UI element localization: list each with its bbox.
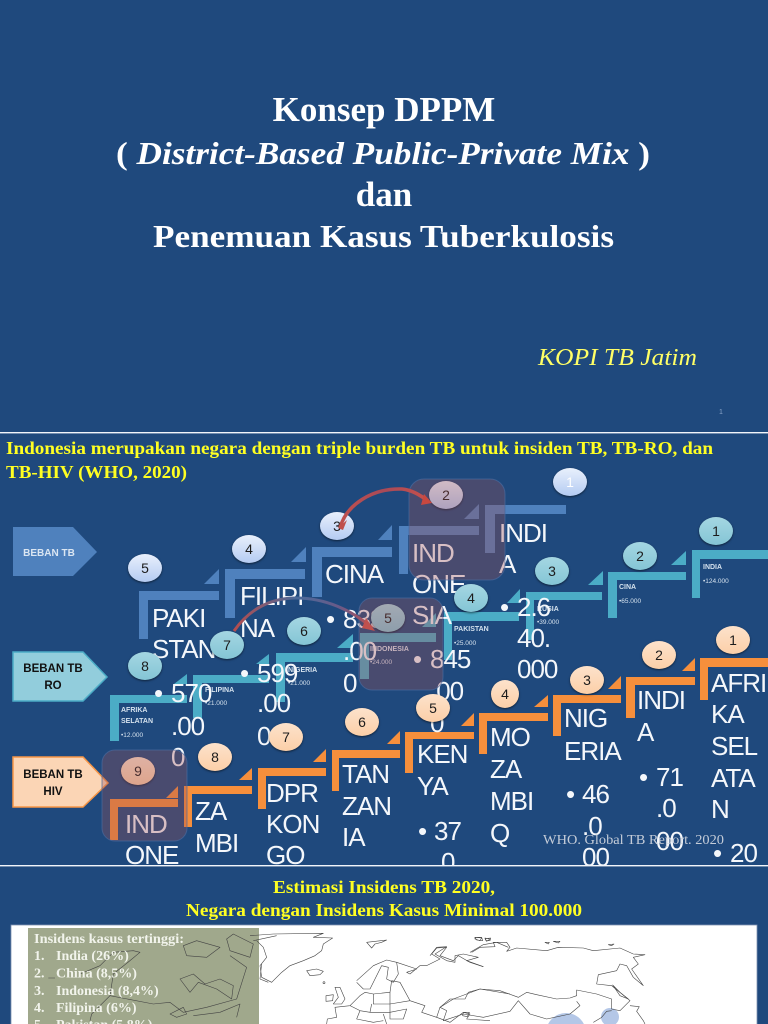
asia xyxy=(430,937,645,1024)
small country labels: •21.000 xyxy=(205,700,228,707)
large country labels HIV row: MBI xyxy=(195,828,238,858)
small country labels: •25.000 xyxy=(454,640,477,647)
large country labels TB row: • xyxy=(240,658,249,688)
map background xyxy=(11,925,757,1024)
large country labels TB row: 000 xyxy=(517,654,558,684)
heading xyxy=(6,442,713,482)
large country labels HIV row: ZA xyxy=(195,796,228,826)
source note: WHO. Global TB Report. 2020 xyxy=(543,833,724,848)
large country labels HIV row: AFRI xyxy=(711,668,766,698)
small country labels: •124.000 xyxy=(703,578,729,585)
large country labels TB row: SIA xyxy=(412,600,453,630)
Indonesia highlight boxes xyxy=(102,479,505,841)
large country labels HIV row: INDI xyxy=(637,685,685,715)
large country labels HIV row: 00 xyxy=(656,826,683,856)
large country labels TB row: .00 xyxy=(171,711,205,741)
arrow label: beban TB: BEBAN TB xyxy=(23,548,75,559)
large country labels TB row: 0 xyxy=(430,708,444,738)
large country labels TB row: .00 xyxy=(257,688,291,718)
arrow label: beban TB RO: BEBAN TB xyxy=(23,663,83,675)
rank badges HIV row: 6 xyxy=(358,714,366,730)
large country labels TB row: 2.6 xyxy=(517,592,551,622)
large country labels TB row: • xyxy=(500,592,509,622)
legend text: 3. xyxy=(34,984,44,999)
curved arrow: rank change RO xyxy=(234,598,375,631)
heading: Estimasi Insidens TB 2020, xyxy=(273,877,495,897)
rank badges HIV row: 8 xyxy=(211,749,219,765)
north america xyxy=(48,934,277,1021)
legend text: 4. xyxy=(34,1001,44,1016)
small country labels: •39.000 xyxy=(537,619,560,626)
rank badges HIV row: 5 xyxy=(429,700,437,716)
rank badges HIV row: 4 xyxy=(501,686,509,702)
large country labels HIV row: 37 xyxy=(434,816,461,846)
large country labels HIV row: Q xyxy=(490,818,509,848)
rank badges TB row: 5 xyxy=(141,560,149,576)
large country labels HIV row: ZA xyxy=(490,754,523,784)
large country labels HIV row: ATA xyxy=(711,763,756,793)
heading: Negara dengan Insidens Kasus Minimal 100.000 xyxy=(186,900,582,920)
rank badges TB row: 3 xyxy=(333,518,341,534)
panel: title slide xyxy=(116,90,723,416)
large country labels TB row: 0 xyxy=(171,742,185,772)
rank badges RO row: 2 xyxy=(636,548,644,564)
large country labels TB row: ONE xyxy=(412,569,466,599)
rank badges RO row: 1 xyxy=(712,523,720,539)
small country labels: AFRIKA xyxy=(121,707,147,714)
large country labels HIV row: 46 xyxy=(582,779,609,809)
large country labels HIV row: IND xyxy=(125,809,167,839)
legend text: Indonesia (8,4%) xyxy=(56,984,159,999)
curved arrow: rank change TB xyxy=(338,489,432,530)
small country labels: •24.000 xyxy=(370,659,393,666)
small country labels: NIGERIA xyxy=(288,667,317,674)
legend text: China (8,5%) xyxy=(56,966,137,982)
large country labels HIV row: .0 xyxy=(582,811,602,841)
divider line xyxy=(0,865,768,866)
small country labels: CINA xyxy=(619,584,636,591)
legend text: Filipina (6%) xyxy=(56,1001,137,1016)
rank badges RO row xyxy=(128,517,733,680)
large country labels TB row: .00 xyxy=(343,636,377,666)
rank badges RO row: 8 xyxy=(141,658,149,674)
heading xyxy=(186,877,582,920)
legend box xyxy=(28,928,259,1024)
small country labels: •21.000 xyxy=(288,680,311,687)
large country labels HIV row: ZAN xyxy=(342,791,391,821)
large country labels TB row: 40. xyxy=(517,623,550,653)
large country labels HIV row: KON xyxy=(266,809,319,839)
large country labels TB row: 845 xyxy=(430,644,471,674)
legend text: Insidens kasus tertinggi: xyxy=(34,932,184,947)
small country labels: SELATAN xyxy=(121,718,153,725)
title xyxy=(116,90,650,254)
large country labels HIV row: 00 xyxy=(582,842,609,872)
rank badges TB row: 1 xyxy=(566,474,574,490)
large country labels HIV row: IA xyxy=(342,822,366,852)
rank badges HIV row: 3 xyxy=(583,672,591,688)
heading: TB-HIV (WHO, 2020) xyxy=(6,462,187,483)
large country labels HIV row: MBI xyxy=(490,786,533,816)
RO row brackets xyxy=(110,550,768,741)
large country labels TB row: PAKI xyxy=(152,603,205,633)
small country labels: INDIA xyxy=(703,564,722,571)
large country labels TB row: 570 xyxy=(171,678,212,708)
large country labels HIV row: • xyxy=(713,838,722,868)
small country labels: INDONESIA xyxy=(370,646,409,653)
large country labels TB row: INDI xyxy=(499,518,547,548)
large country labels HIV row xyxy=(125,668,766,877)
legend text: 2. xyxy=(34,966,44,982)
high burden bubbles xyxy=(546,1008,619,1024)
large country labels TB row: IND xyxy=(412,538,454,568)
large country labels TB row: 833 xyxy=(343,604,384,634)
large country labels HIV row: 0 xyxy=(441,847,455,877)
large country labels HIV row: N xyxy=(711,794,729,824)
rank badges HIV row: 7 xyxy=(282,729,290,745)
panel: triple burden chart xyxy=(6,438,768,877)
arrow label: beban TB xyxy=(13,527,97,576)
arrow label: beban TB HIV xyxy=(13,757,108,807)
large country labels TB row: .00 xyxy=(430,676,464,706)
large country labels TB row: CINA xyxy=(325,559,385,589)
rank badges HIV row: 1 xyxy=(729,632,737,648)
panel: incidence map xyxy=(11,877,757,1024)
HIV row brackets xyxy=(110,658,768,840)
rank badges TB row: 2 xyxy=(442,487,450,503)
large country labels HIV row: YA xyxy=(417,771,449,801)
europe and greenland xyxy=(250,933,510,1024)
large country labels TB row: FILIPI xyxy=(240,581,303,611)
small country labels: •12.000 xyxy=(121,732,144,739)
large country labels HIV row: DPR xyxy=(266,778,318,808)
large country labels HIV row: 71 xyxy=(656,762,683,792)
rank badges TB row xyxy=(128,468,587,582)
small country labels: FILIPINA xyxy=(205,687,234,694)
legend text xyxy=(34,932,184,1024)
heading: Indonesia merupakan negara dengan triple burden TB untuk insiden TB, TB-RO, dan xyxy=(6,438,713,458)
large country labels TB row: • xyxy=(413,644,422,674)
legend text: India (26%) xyxy=(56,949,129,964)
large country labels HIV row: 20 xyxy=(730,838,757,868)
arrow label: beban TB RO: RO xyxy=(44,680,62,692)
title: Penemuan Kasus Tuberkulosis xyxy=(153,218,614,254)
rank badges HIV row xyxy=(121,626,750,785)
author: KOPI TB Jatim xyxy=(537,345,697,371)
arrow label: beban TB HIV: BEBAN TB xyxy=(23,769,83,781)
large country labels TB row: 0 xyxy=(257,721,271,751)
large country labels HIV row: A xyxy=(637,717,655,747)
rank badges RO row: 6 xyxy=(300,623,308,639)
TB row brackets xyxy=(139,504,566,639)
page number: 1 xyxy=(719,409,723,416)
large country labels HIV row: NIG xyxy=(564,703,607,733)
large country labels HIV row: TAN xyxy=(342,759,389,789)
large country labels TB row: NA xyxy=(240,613,276,643)
divider line xyxy=(0,432,768,433)
legend text: 1. xyxy=(34,949,44,964)
rank badges RO row: 3 xyxy=(548,563,556,579)
arrow label: beban TB HIV: HIV xyxy=(43,786,63,798)
large country labels TB row: • xyxy=(154,678,163,708)
rank badges TB row: 4 xyxy=(245,541,253,557)
large country labels HIV row: KEN xyxy=(417,739,467,769)
world map outline xyxy=(48,933,645,1024)
large country labels TB row xyxy=(152,518,558,772)
large country labels TB row: STAN xyxy=(152,634,215,664)
rank badges HIV row: 2 xyxy=(655,647,663,663)
rank badges RO row: 5 xyxy=(384,610,392,626)
large country labels HIV row: • xyxy=(639,762,648,792)
large country labels TB row: • xyxy=(326,604,335,634)
large country labels HIV row: SEL xyxy=(711,731,758,761)
rank badges RO row: 4 xyxy=(467,590,475,606)
large country labels HIV row: • xyxy=(418,816,427,846)
title: ( District-Based Public-Private Mix ) xyxy=(116,135,650,171)
small country labels: PAKISTAN xyxy=(454,626,489,633)
large country labels HIV row: .0 xyxy=(656,793,676,823)
large country labels HIV row: GO xyxy=(266,840,304,870)
title: dan xyxy=(356,175,412,214)
arrow label: beban TB RO xyxy=(13,652,107,701)
large country labels TB row: 0 xyxy=(343,668,357,698)
rank badges RO row: 7 xyxy=(223,637,231,653)
small country labels: RUSIA xyxy=(537,606,559,613)
small country labels xyxy=(121,564,729,739)
large country labels HIV row: KA xyxy=(711,699,745,729)
large country labels TB row: 599 xyxy=(257,658,298,688)
large country labels HIV row: ERIA xyxy=(564,736,622,766)
large country labels TB row: A xyxy=(499,549,517,579)
title: Konsep DPPM xyxy=(273,90,495,129)
rank badges HIV row: 9 xyxy=(134,763,142,779)
small country labels: •65.000 xyxy=(619,598,642,605)
large country labels HIV row: • xyxy=(566,779,575,809)
large country labels HIV row: ONE xyxy=(125,840,179,870)
large country labels HIV row: MO xyxy=(490,722,530,752)
